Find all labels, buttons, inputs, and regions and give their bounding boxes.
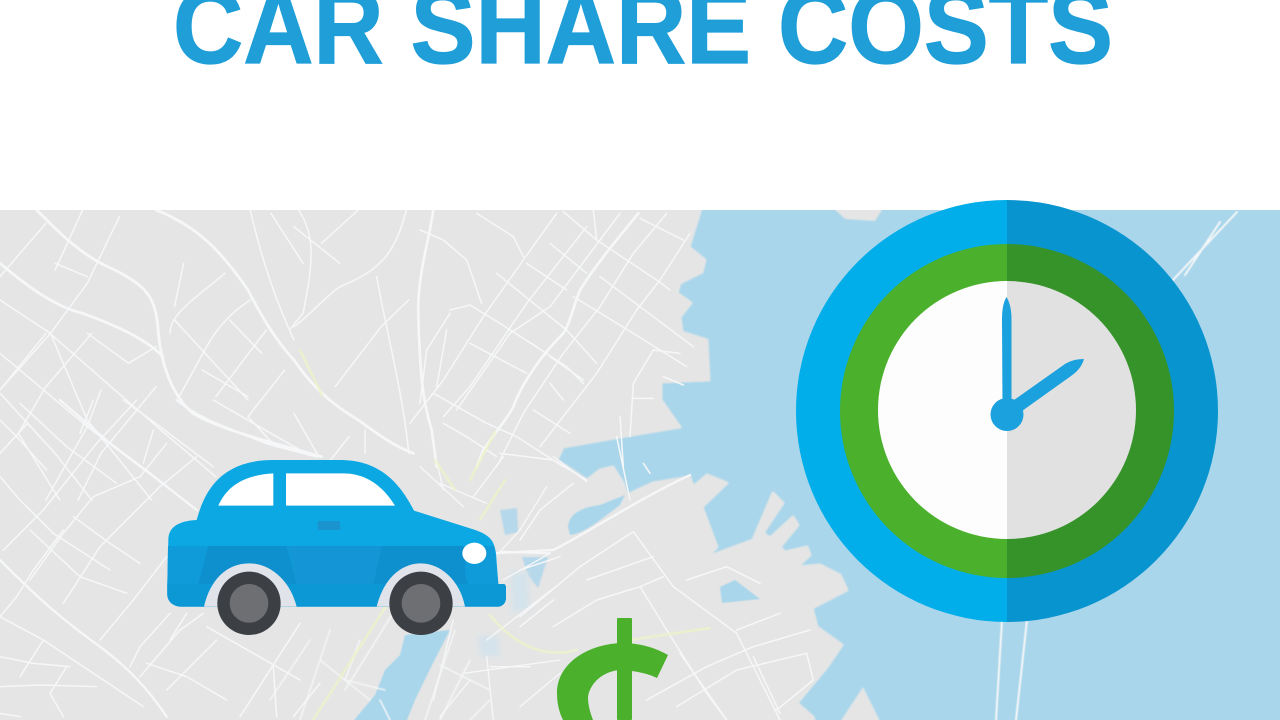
clock green ring <box>840 244 1007 578</box>
streets: yellow highways <box>300 350 710 720</box>
streets: south-west <box>0 400 320 717</box>
car headlight <box>462 543 486 564</box>
car body <box>167 460 506 607</box>
icon: clock <box>796 200 1218 622</box>
streets: central south <box>420 447 587 720</box>
clock face <box>878 281 1007 539</box>
icon: dollar sign <box>557 618 668 720</box>
car door handle <box>318 521 340 530</box>
car centre panel <box>288 546 382 584</box>
car wheel arches <box>204 563 465 607</box>
land: top right sliver and bottom island <box>834 210 882 720</box>
icon: car <box>167 460 506 635</box>
land mass <box>0 205 847 720</box>
soft pale patches near bridges <box>478 572 530 656</box>
streets: north-west and central <box>0 210 413 500</box>
car windows <box>218 473 395 506</box>
bridges <box>996 212 1237 720</box>
water: river and ponds <box>350 495 760 720</box>
car side sills <box>167 584 506 607</box>
car lower panel <box>167 546 506 607</box>
streets: under the car <box>270 610 490 720</box>
car wheels <box>217 572 453 635</box>
streets: downtown grid <box>410 210 693 467</box>
map background <box>0 205 1280 720</box>
water: soft inland ponds <box>500 508 548 588</box>
car dark panels <box>198 546 488 584</box>
clock outer ring <box>796 200 1007 622</box>
clock hands <box>990 297 1084 431</box>
streets: harbour district <box>493 437 813 720</box>
